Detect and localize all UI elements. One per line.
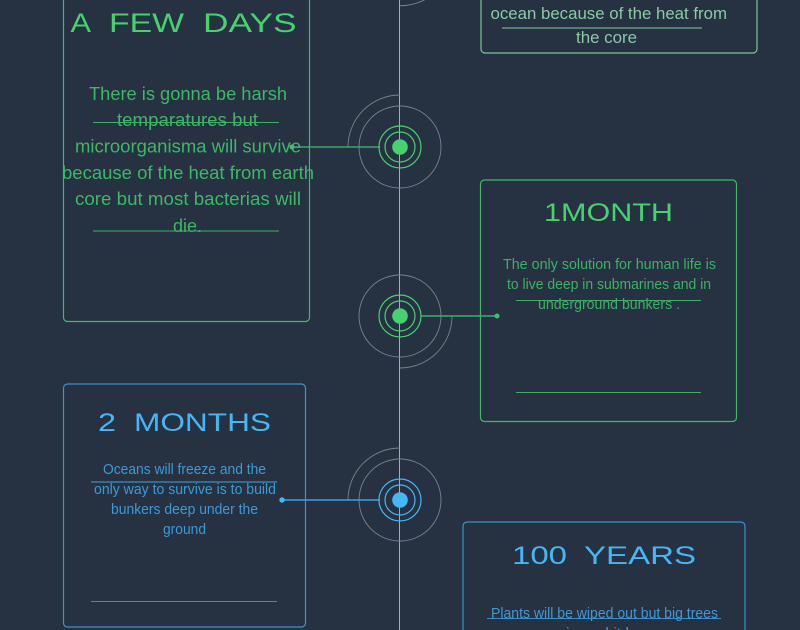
panel: a few days <box>62 0 314 322</box>
text block: a few days <box>62 84 314 236</box>
text block: a few days: because of the heat from earth <box>62 163 314 183</box>
text block: 1 month <box>503 257 716 313</box>
heading: 100 years <box>512 542 696 570</box>
panel: 2 months <box>64 384 306 627</box>
text block: 100 years: Plants will be wiped out but big trees <box>491 606 718 622</box>
node: a few days <box>290 95 441 188</box>
text block: 2 months: bunkers deep under the <box>111 502 258 518</box>
heading: 2 months <box>98 409 271 437</box>
text block: ocean heat <box>490 5 727 47</box>
text block: a few days: core but most bacterias will <box>75 189 301 209</box>
heading: 2 months: MONTHS <box>134 409 271 437</box>
text block: 2 months <box>94 462 276 538</box>
central timeline axis <box>398 0 400 630</box>
text block: a few days: die. <box>173 216 202 236</box>
text block: 2 months: ground <box>163 522 206 538</box>
panel: 1 month <box>480 180 736 422</box>
text block: a few days: temparatures but <box>117 110 258 130</box>
text block: ocean heat: the core <box>576 29 637 47</box>
node: 1 month <box>359 275 500 368</box>
text block: a few days: There is gonna be harsh <box>89 84 287 104</box>
heading: a few days <box>70 8 296 38</box>
heading: 1 month: 1MONTH <box>544 199 673 227</box>
panel: 100 years <box>463 522 745 630</box>
text block: a few days: microorganisma will survive <box>75 136 301 156</box>
panel: ocean heat (top right) <box>481 0 757 53</box>
heading: 100 years: YEARS <box>584 542 696 570</box>
text block: 100 years <box>491 606 718 630</box>
heading: a few days: DAYS <box>203 8 296 38</box>
text block: 2 months: only way to survive is to build <box>94 482 276 498</box>
node: 2 months <box>279 448 441 541</box>
text block: 1 month: The only solution for human life is <box>503 257 716 273</box>
heading: a few days: A <box>70 8 91 38</box>
heading: a few days: FEW <box>109 8 184 38</box>
heading: 100 years: 100 <box>512 542 567 570</box>
text block: 1 month: underground bunkers . <box>538 297 680 313</box>
text block: 2 months: Oceans will freeze and the <box>103 462 266 478</box>
top node arc <box>400 0 425 6</box>
heading: 2 months: 2 <box>98 409 116 437</box>
text block: 1 month: to live deep in submarines and in <box>507 277 711 293</box>
text block: ocean heat: ocean because of the heat from <box>490 5 727 23</box>
